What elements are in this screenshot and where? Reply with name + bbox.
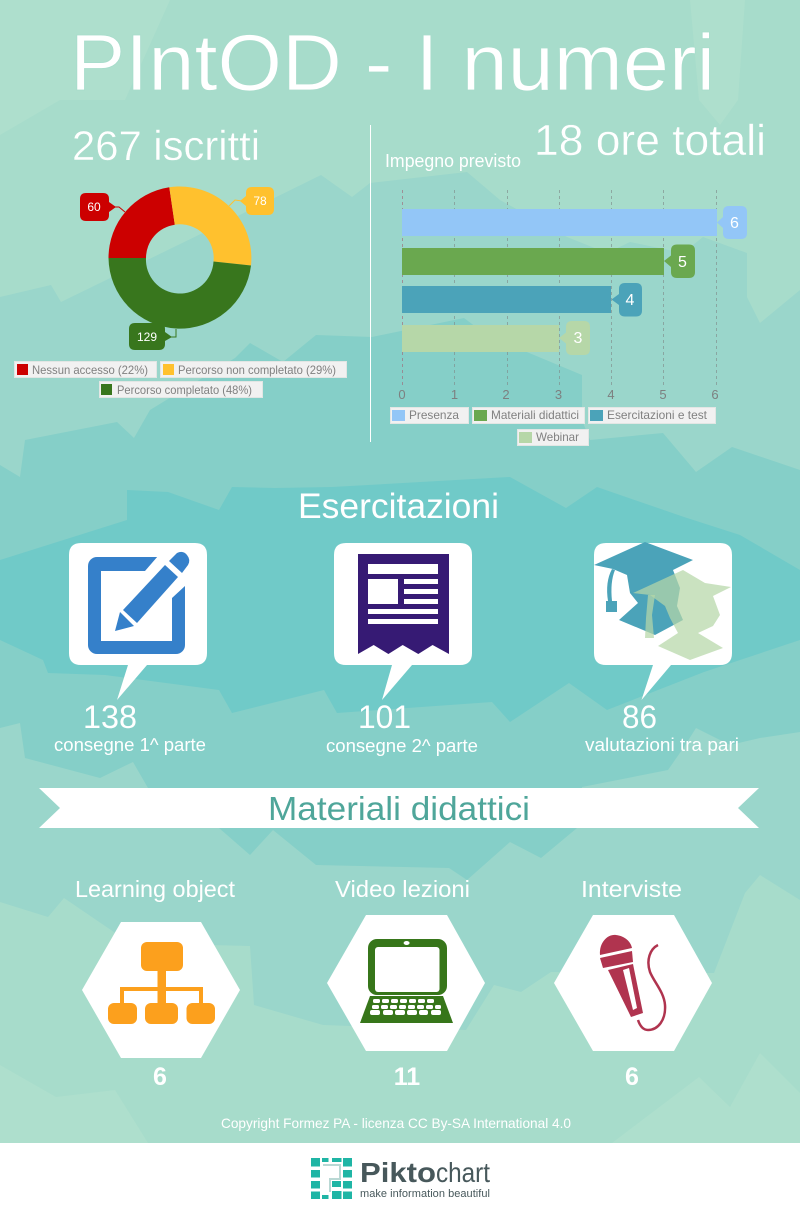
icon: laptop [360,939,453,1023]
value: 11: 11 [394,1063,420,1091]
icon: document [358,554,449,654]
axis labels: 4 [607,387,615,402]
value: 86: 86 [622,699,657,735]
callout: 78 [229,187,274,215]
legend: donut chart: Percorso completato (48%) [117,383,252,397]
axis labels: 6 [711,387,719,402]
icon: graduates [594,542,731,660]
axis labels: 0 [398,387,406,402]
value: 138: 138 [83,699,137,735]
legend: bar chart: Esercitazioni e test [607,408,708,422]
hexagon 3 [554,915,712,1051]
bar: Esercitazioni e test 4: 4 [626,292,635,309]
legend: bar chart: Webinar [536,430,579,444]
speech bubble 3 [594,543,732,700]
hexagon 1 [82,922,240,1058]
bar chart: ore [398,190,747,402]
axis labels: 5 [659,387,667,402]
label: Impegno previsto: Impegno previsto [385,151,521,171]
heading: 18 ore totali: 18 ore totali [534,116,766,165]
callout: 60 [80,193,125,221]
axis labels: 2 [502,387,510,402]
panel: Video lezioni [327,876,485,1091]
value: 6: 6 [625,1063,639,1091]
divider line [370,125,371,442]
heading: Interviste: Interviste [581,876,682,902]
callout: 129: 129 [137,330,157,344]
legend: donut chart: Percorso non completato (29%) [178,363,336,377]
legend: bar chart: Presenza [409,408,459,422]
wordmark: make information beautiful [360,1188,490,1200]
callout: 60: 60 [87,200,101,214]
icon: edit pencil [88,552,190,654]
legend: bar chart: Materiali didattici [491,408,579,422]
value: 101: 101 [358,699,411,735]
panel: Interviste [554,876,712,1091]
donut chart: iscritti [80,187,274,350]
heading: Esercitazioni: Esercitazioni [298,487,499,526]
icon: hierarchy [108,942,215,1024]
icon: Piktochart logo [311,1158,352,1199]
axis labels: 3 [555,387,562,402]
copyright: Copyright Formez PA - licenza CC By-SA International 4.0 [221,1115,571,1131]
wordmark [360,1157,490,1200]
bar: Presenza 6 [402,206,747,239]
legend: bar chart [390,408,716,446]
legend: donut chart: Nessun accesso (22%) [32,363,148,377]
bar: Materiali didattici 5: 5 [678,254,687,271]
icon: microphone [600,935,665,1030]
speech bubble 2 [334,543,472,700]
value: 6: 6 [153,1063,167,1091]
speech bubble 1 [69,543,207,700]
axis labels [398,387,719,402]
axis labels: 1 [451,387,458,402]
ribbon: Materiali didattici [39,788,759,828]
ribbon: Materiali didattici: Materiali didattici [268,790,530,827]
wordmark: chart [436,1157,490,1188]
heading: Video lezioni: Video lezioni [335,876,470,902]
panel: consegne 1 [54,543,207,755]
panel: consegne 2 [326,543,478,756]
hexagon 2 [327,915,485,1051]
bar: Webinar 3: 3 [574,330,583,347]
callout: 129 [129,323,176,350]
bar: Webinar 3 [402,321,590,355]
panel: Learning object [75,876,240,1091]
bar: Esercitazioni e test 4 [402,283,642,316]
bar: Materiali didattici 5 [402,244,695,278]
bar: Presenza 6: 6 [730,215,739,232]
footer bar [0,1143,800,1216]
caption: valutazioni tra pari: valutazioni tra pari [585,735,739,755]
panel: valutazioni [585,542,739,755]
callout: 78: 78 [253,194,267,208]
heading: Learning object: Learning object [75,876,236,902]
caption: consegne 1^ parte: consegne 1^ parte [54,735,206,755]
legend: donut chart [14,362,346,398]
title: PIntOD - I numeri [70,18,715,107]
wordmark: Pikto [360,1157,436,1188]
caption: consegne 2^ parte: consegne 2^ parte [326,736,478,756]
heading: 267 iscritti: 267 iscritti [72,122,260,169]
